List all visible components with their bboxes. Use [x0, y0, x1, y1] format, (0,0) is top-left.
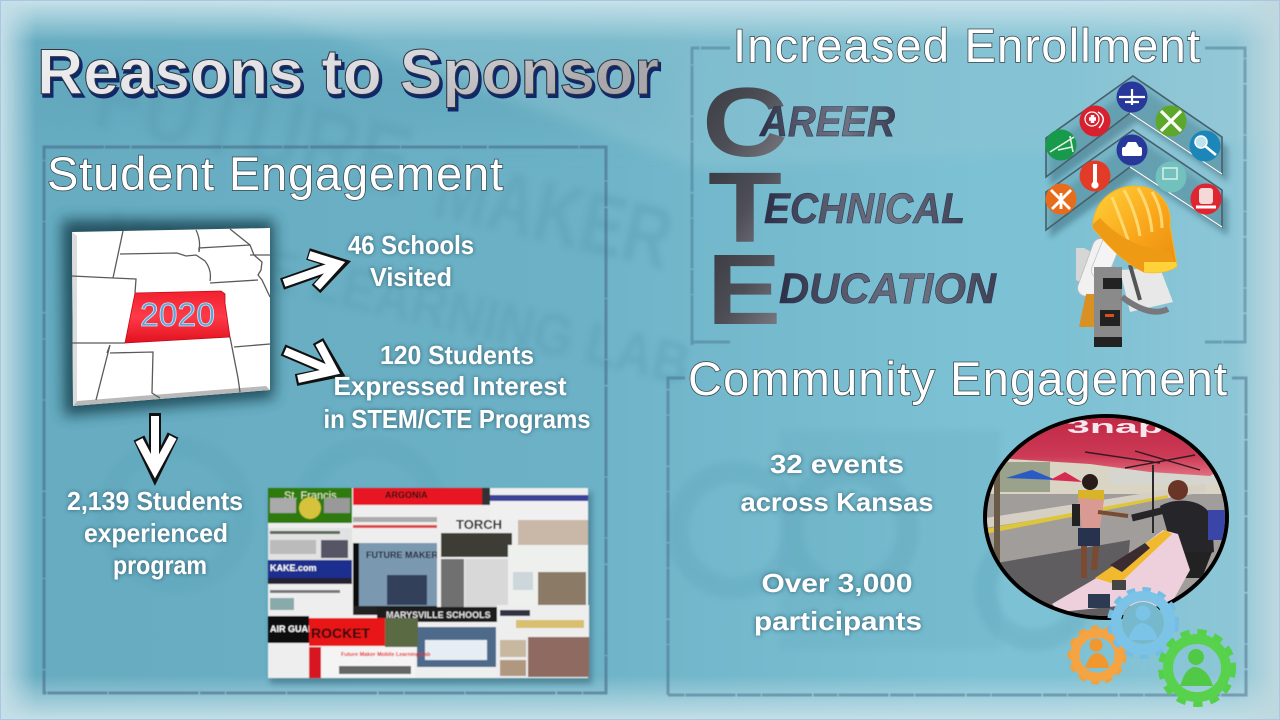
heading: community engagement: Community Engagement [688, 352, 1227, 405]
truck ghost lettering: FUTURE [85, 37, 422, 218]
icon: blue gear [1111, 591, 1175, 655]
title: Reasons to Sponsor [39, 39, 661, 111]
panel: increased enrollment frame [692, 48, 1245, 345]
logo: CTE acronym: T [708, 152, 782, 264]
arrow: to schools visited [282, 254, 340, 289]
text: over 3,000 participants: Over 3,000 [762, 568, 912, 598]
truck ghost wheels [107, 447, 1085, 640]
icon: orange gear [1071, 629, 1123, 681]
text: 120 students expressed interest: 120 Students [380, 340, 534, 370]
arrow: to students interest [283, 341, 336, 380]
logo: CTE acronym: E [707, 234, 781, 346]
tools: rolled plans and paper [1075, 227, 1173, 347]
heading: student engagement: Student Engagement [47, 147, 503, 200]
collage: news clippings: ROCKET [311, 625, 371, 641]
icon: hard hat and tools [1075, 186, 1177, 347]
panel: community engagement frame [668, 378, 1246, 695]
text: 120 students expressed interest: Expressed Interest [334, 371, 567, 401]
photo: community event [983, 414, 1229, 620]
collage: news clippings: St. Francis [284, 490, 337, 502]
text: 2,139 students experienced program: 2,139 Students [67, 486, 243, 516]
text: 46 schools visited: 46 Schools [348, 230, 474, 260]
career icon circles [1046, 82, 1222, 214]
arrow: down to students experienced [139, 413, 173, 472]
logo: CTE acronym [702, 67, 997, 346]
photo: community event: 3nap [1067, 417, 1163, 437]
logo: CTE acronym: DUCATION [779, 265, 997, 313]
collage: news clippings: TORCH [456, 517, 502, 532]
panel: student engagement frame [44, 147, 606, 693]
text: 32 events across Kansas [740, 449, 934, 517]
heading: increased enrollment: Increased Enrollment [733, 19, 1200, 72]
collage: news clippings: AIR GUARD [270, 624, 321, 634]
text: 120 students expressed interest [324, 340, 590, 434]
text: 2,139 students experienced program: program [113, 550, 207, 580]
logo: CTE acronym: AREER [759, 98, 895, 146]
collage: news clippings: ARGONIA [385, 490, 428, 500]
Kansas state [125, 291, 230, 343]
text: 32 events across Kansas: 32 events [770, 449, 904, 479]
truck ghost lettering: MOBILE LEARNING LAB [97, 199, 696, 398]
collage: news clippings: KAKE.com [270, 563, 317, 573]
hard hat [1093, 186, 1177, 273]
collage: news clippings [268, 488, 592, 684]
text: 32 events across Kansas: across Kansas [740, 487, 934, 517]
text: over 3,000 participants: participants [754, 606, 922, 636]
text: 2,139 students experienced program: experienced [84, 518, 228, 548]
collage: news clippings: FUTURE MAKER [366, 550, 438, 560]
icon: green gear [1162, 633, 1232, 703]
truck ghost lettering: MAKER [426, 140, 681, 288]
text: 46 schools visited [348, 230, 474, 292]
logo: CTE acronym: ECHNICAL [764, 185, 965, 233]
map: Kansas 2020 [62, 220, 274, 416]
Kansas state: 2020 [140, 296, 215, 333]
title: Reasons to Sponsor [37, 36, 659, 108]
icon: career chevrons [1046, 76, 1228, 238]
text: 46 schools visited: Visited [370, 262, 452, 292]
collage: news clippings: Future Maker Mobile Learning Lab [341, 652, 431, 658]
text: 120 students expressed interest: in STEM/CTE Programs [324, 404, 590, 434]
text: over 3,000 participants [754, 568, 922, 636]
collage: news clippings: MARYSVILLE SCHOOLS [386, 610, 491, 620]
logo: CTE acronym: C [702, 67, 788, 177]
text: 2,139 students experienced program [67, 486, 243, 580]
truck ghost lettering [85, 37, 696, 398]
